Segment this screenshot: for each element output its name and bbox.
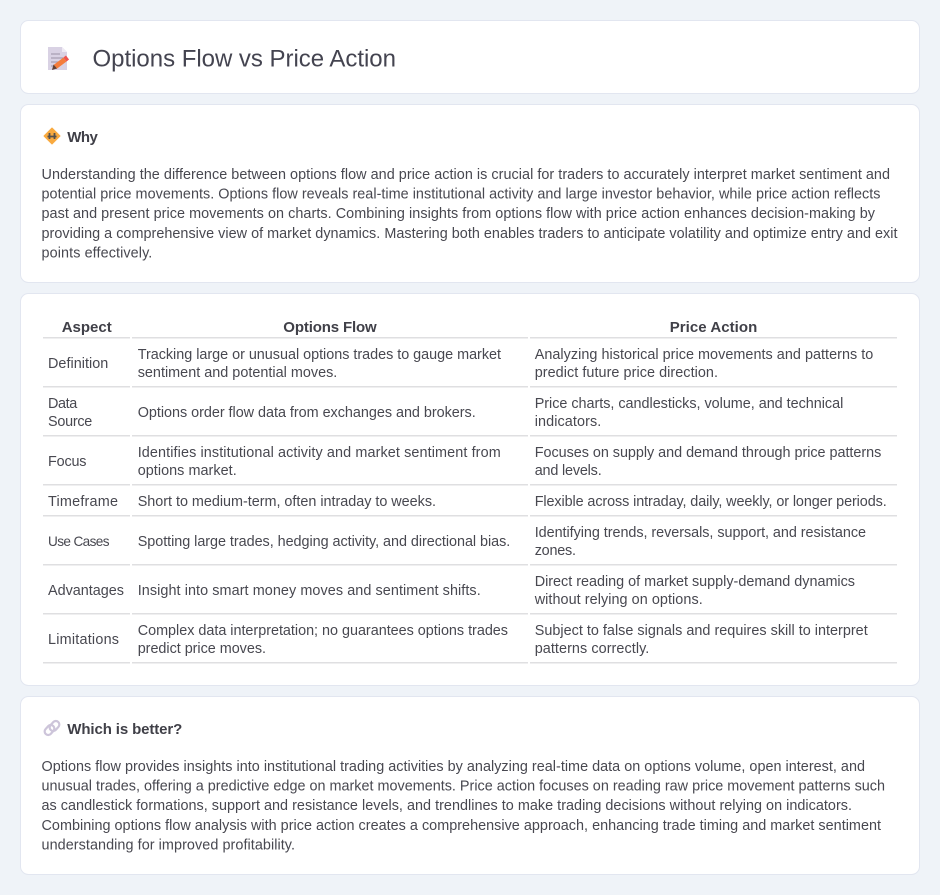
table row: definition: Analyzing historical price movements and patterns to bbox=[535, 347, 873, 363]
text block: why paragraph: providing a comprehensive view of market dynamics. Mastering both enables traders to anticipate volatility and optimize entry and exit bbox=[42, 226, 898, 242]
table row: focus: options market. bbox=[138, 463, 237, 479]
table row: data source: indicators. bbox=[535, 414, 601, 430]
table row: definition: predict future price direction. bbox=[535, 365, 718, 381]
table row: data source: Source bbox=[48, 414, 92, 430]
table row: use cases: Spotting large trades, hedging activity, and directional bias. bbox=[138, 534, 510, 550]
icon: memo with pencil bbox=[48, 47, 68, 70]
title: Options Flow vs Price Action bbox=[92, 46, 396, 72]
text block: why paragraph bbox=[42, 167, 898, 261]
table row: use cases: zones. bbox=[535, 543, 576, 559]
table row: focus: and levels. bbox=[535, 463, 602, 479]
text block: why paragraph: potential price movements. Options flow reveals real-time institutional activity and large investor behavior, while price action reflects bbox=[42, 187, 880, 203]
table row: timeframe: Short to medium-term, often intraday to weeks. bbox=[138, 494, 436, 510]
text block: which is better paragraph: as candlestick formations, support and resistance levels, and trendlines to make trading decisions without relying on indicators. bbox=[42, 798, 852, 814]
table row: data source: Options order flow data from exchanges and brokers. bbox=[138, 405, 476, 421]
icon: link bbox=[43, 720, 61, 736]
table row: definition: Tracking large or unusual options trades to gauge market bbox=[138, 347, 501, 363]
table row: focus: Identifies institutional activity and market sentiment from bbox=[138, 445, 501, 461]
heading: which is better: Which is better? bbox=[67, 721, 182, 738]
table row: use cases bbox=[43, 525, 897, 566]
table row: timeframe bbox=[43, 494, 897, 516]
table row: timeframe: Flexible across intraday, daily, weekly, or longer periods. bbox=[535, 494, 887, 510]
table row: limitations: patterns correctly. bbox=[535, 641, 649, 657]
table header row bbox=[43, 319, 897, 338]
text block: which is better paragraph: unusual trades, offering a predictive edge on market movements. Price action focuses on reading raw price movement patterns such bbox=[42, 779, 885, 795]
table row: use cases: Identifying trends, reversals, support, and resistance bbox=[535, 525, 866, 541]
table row: data source: Price charts, candlesticks, volume, and technical bbox=[535, 396, 843, 412]
table row: focus: Focuses on supply and demand through price patterns bbox=[535, 445, 881, 461]
icon: warning diamond bbox=[44, 128, 60, 144]
panel: title header bbox=[20, 20, 920, 94]
table row: definition bbox=[43, 347, 897, 388]
table row: use cases: Use Cases bbox=[48, 534, 110, 549]
table row: definition: sentiment and potential moves. bbox=[138, 365, 337, 381]
table row: focus: Focus bbox=[48, 454, 86, 470]
table row: advantages: Advantages bbox=[48, 583, 124, 599]
table row: data source bbox=[43, 396, 897, 436]
table header row: Aspect bbox=[62, 319, 112, 336]
table row: data source: Data bbox=[48, 396, 77, 412]
table header row: Price Action bbox=[670, 319, 757, 336]
text block: why paragraph: points effectively. bbox=[42, 245, 152, 261]
text block: which is better paragraph bbox=[42, 759, 885, 853]
text block: why paragraph: Understanding the difference between options flow and price action is crucial for traders to accurately interpret market sentiment and bbox=[42, 167, 890, 183]
text block: which is better paragraph: understanding for improved profitability. bbox=[42, 837, 295, 853]
table row: advantages bbox=[43, 574, 897, 614]
table row: advantages: Direct reading of market supply-demand dynamics bbox=[535, 574, 855, 590]
table row: limitations: Complex data interpretation; no guarantees options trades bbox=[138, 623, 508, 639]
table row: limitations bbox=[43, 623, 897, 664]
table row: limitations: Limitations bbox=[48, 632, 119, 648]
text block: why paragraph: past and present price movements on charts. Combining insights from options flow with price action enhances decision-making by bbox=[42, 206, 876, 222]
table header row: Options Flow bbox=[283, 319, 377, 336]
heading: why: Why bbox=[67, 129, 98, 146]
text block: which is better paragraph: Options flow provides insights into institutional trading activities by analyzing real-time data on options volume, open interest, and bbox=[42, 759, 865, 775]
panel: which is better bbox=[20, 696, 920, 874]
table row: timeframe: Timeframe bbox=[48, 494, 118, 510]
table row: limitations: Subject to false signals and requires skill to interpret bbox=[535, 623, 868, 639]
table row: advantages: Insight into smart money moves and sentiment shifts. bbox=[138, 583, 481, 599]
text block: which is better paragraph: Combining options flow analysis with price action creates a comprehensive approach, enhancing trade timing and market sentiment bbox=[42, 818, 881, 834]
table row: limitations: predict price moves. bbox=[138, 641, 266, 657]
panel: comparison table bbox=[20, 294, 920, 686]
panel: why bbox=[20, 104, 920, 282]
table row: focus bbox=[43, 445, 897, 486]
table row: definition: Definition bbox=[48, 356, 108, 372]
table row: advantages: without relying on options. bbox=[534, 592, 703, 608]
